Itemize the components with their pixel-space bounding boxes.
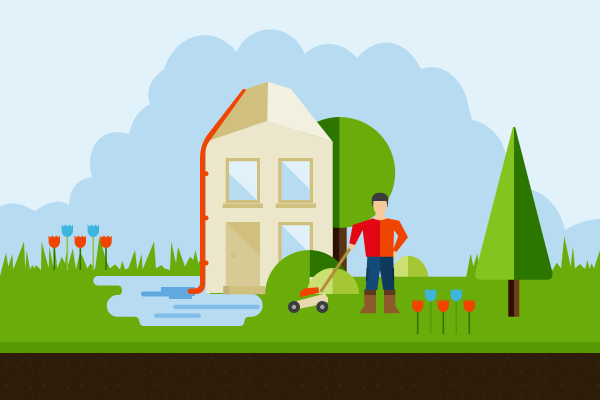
mower cover [300,287,319,297]
water ripple two [154,314,201,318]
shirt [349,218,408,257]
red tulip heads [412,300,475,312]
window upper right [276,158,316,208]
roof left [206,82,268,142]
large cloud [0,29,600,300]
round tree crown [284,117,395,228]
mower wheels [288,301,328,313]
grass spikes left [0,237,200,281]
boots [359,290,400,313]
gardener [349,193,408,313]
window lower right [278,222,313,276]
house wall [206,121,333,293]
light bush [307,268,359,294]
left tulips [49,224,112,270]
pine trunk [508,279,519,317]
blue tulip stems [431,300,456,334]
jeans [366,256,394,290]
drain pipe [188,89,246,294]
puddle water [93,276,263,326]
back bush right [392,256,428,278]
puddle [93,276,263,326]
right tulips [412,289,475,334]
mower body [297,294,328,309]
pine tree [475,127,552,317]
face [374,200,386,215]
hair [372,193,388,208]
neck [373,210,387,220]
soil [0,353,600,400]
blue tulip heads [62,224,99,237]
blue tulip heads [425,289,462,301]
roof right [267,82,333,142]
lawn mower [288,246,352,313]
red tulip heads [49,236,112,248]
red tulip stems [418,310,469,334]
house [206,82,333,294]
door [226,222,260,286]
round tree [284,117,395,278]
mower handle [321,246,352,292]
pine crown [475,127,552,280]
grass spikes right [466,236,600,280]
water ripple one [173,305,260,309]
window upper left [223,158,263,208]
lawn dark edge [0,342,600,353]
hands [349,244,397,259]
red tulip stems [54,246,106,270]
round tree trunk [333,226,347,278]
deep water patch [141,287,195,299]
lawn [0,277,600,343]
front bush [265,250,349,298]
door step [223,286,265,294]
blue tulip stems [67,236,93,270]
